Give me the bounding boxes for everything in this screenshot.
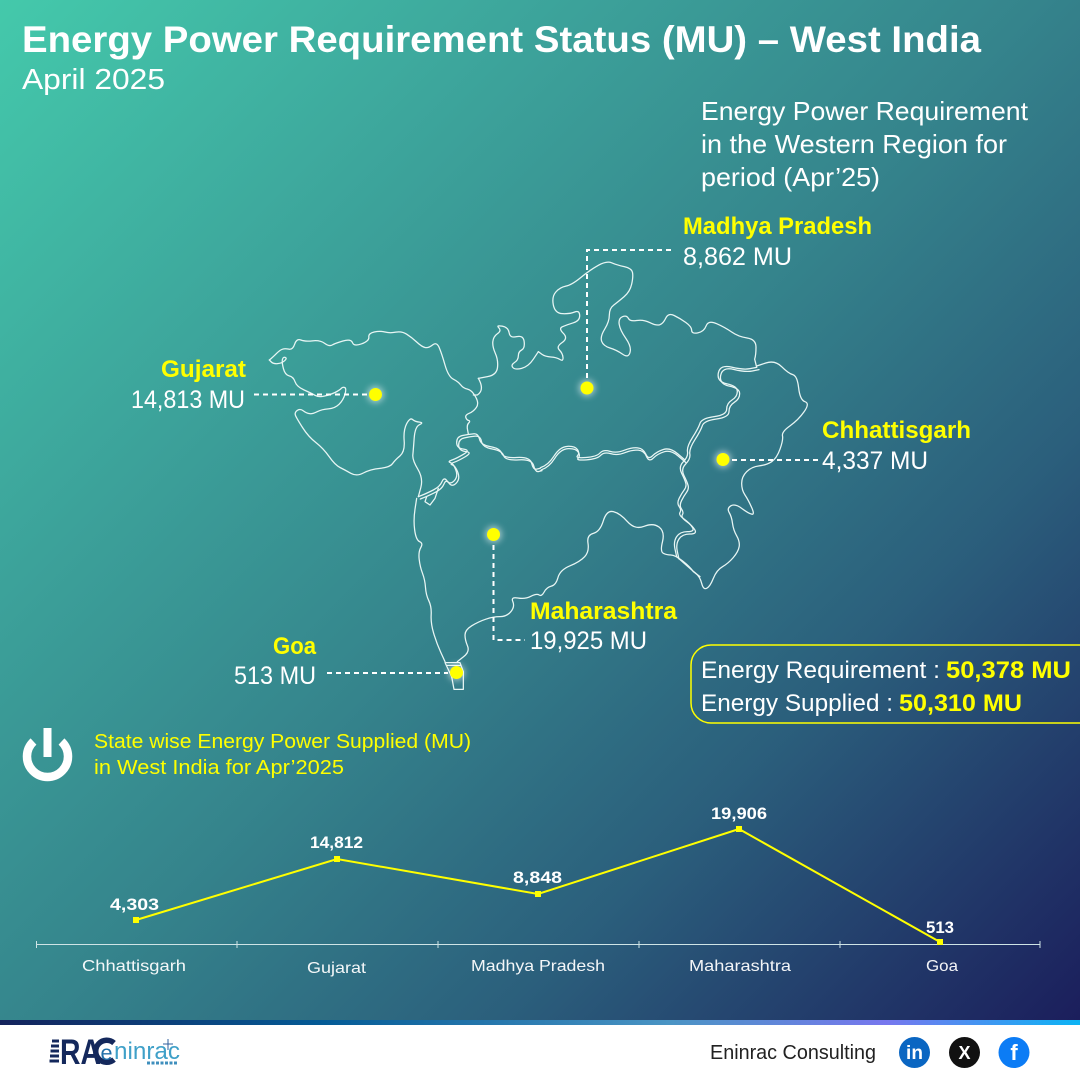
- connector: Gujarat: [254, 394, 368, 396]
- logo: Eninrac: ninrac: [114, 1038, 180, 1065]
- marker: Gujarat: [368, 386, 384, 402]
- footer background: [0, 1025, 1080, 1080]
- line chart: state wise energy supplied: [36, 804, 1040, 977]
- callout: energy totals: Energy Requirement :: [701, 657, 940, 684]
- footer text: Eninrac Consulting: [710, 1042, 876, 1064]
- label: Madhya Pradesh: [683, 213, 872, 271]
- line chart: state wise energy supplied: Maharashtra: [689, 958, 791, 975]
- label: Madhya Pradesh: 8,862 MU: [683, 243, 792, 271]
- label: Maharashtra: [530, 598, 678, 655]
- marker: Maharashtra: [486, 526, 502, 542]
- logo: Eninrac: [50, 1033, 180, 1072]
- label: Chhattisgarh: 4,337 MU: [822, 447, 928, 475]
- marker: Chhattisgarh: [715, 452, 731, 468]
- text block: map description: [701, 96, 1029, 192]
- line chart: state wise energy supplied: Goa: [926, 958, 958, 975]
- label: Goa: Goa: [273, 633, 317, 660]
- callout: energy totals: Energy Supplied :: [701, 690, 893, 717]
- marker: Madhya Pradesh: [579, 380, 595, 396]
- logo: Eninrac: RA: [60, 1033, 101, 1072]
- icon: X: X: [958, 1043, 971, 1063]
- line chart: state wise energy supplied: Madhya Pradesh: [471, 958, 605, 975]
- line chart: state wise energy supplied: 4,303: [110, 895, 159, 914]
- label: Chhattisgarh: [822, 417, 971, 475]
- label: Gujarat: 14,813 MU: [131, 386, 245, 414]
- line chart: state wise energy supplied: 8,848: [513, 868, 562, 887]
- icon: Facebook: [998, 1037, 1030, 1068]
- connector: Maharashtra: [494, 545, 525, 640]
- label: Maharashtra: 19,925 MU: [530, 627, 647, 655]
- line chart: state wise energy supplied: Chhattisgarh: [82, 958, 186, 975]
- icon: LinkedIn: [899, 1037, 930, 1068]
- callout: energy totals: 50,378 MU: [946, 657, 1071, 684]
- line chart: state wise energy supplied: Gujarat: [307, 960, 367, 977]
- marker: Goa: [448, 664, 464, 680]
- text block: map description: period (Apr’25): [701, 162, 880, 192]
- chart heading: State wise Energy Power Supplied (MU): [94, 731, 471, 753]
- label: Goa: 513 MU: [234, 662, 316, 690]
- label: Goa: [234, 633, 317, 690]
- callout: energy totals: 50,310 MU: [899, 690, 1022, 717]
- label: Maharashtra: Maharashtra: [530, 598, 678, 625]
- logo: Eninrac: e: [100, 1042, 112, 1065]
- icon: power symbol: [27, 728, 68, 777]
- connector: Goa: [327, 672, 448, 674]
- line chart: state wise energy supplied: 513: [926, 918, 954, 937]
- label: Chhattisgarh: Chhattisgarh: [822, 417, 971, 444]
- line chart: state wise energy supplied: 19,906: [711, 804, 767, 823]
- line chart: state wise energy supplied: 14,812: [310, 833, 363, 852]
- icon: Facebook: f: [1010, 1040, 1018, 1065]
- label: Gujarat: [131, 356, 246, 414]
- title: Energy Power Requirement Status (MU) – West India: [22, 19, 981, 60]
- footer colour bar: [0, 1020, 1080, 1025]
- map: West India state outlines: [269, 262, 807, 689]
- connector: Madhya Pradesh: [587, 250, 671, 380]
- subtitle: April 2025: [22, 64, 165, 96]
- label: Madhya Pradesh: Madhya Pradesh: [683, 213, 872, 240]
- label: Gujarat: Gujarat: [161, 356, 246, 383]
- connector: Chhattisgarh: [732, 459, 820, 461]
- icon: LinkedIn: in: [906, 1043, 923, 1064]
- text block: map description: Energy Power Requirement: [701, 96, 1029, 126]
- chart heading: in West India for Apr’2025: [94, 757, 344, 779]
- chart heading: [94, 731, 471, 779]
- callout: energy totals: [691, 645, 1080, 723]
- text block: map description: in the Western Region for: [701, 129, 1007, 159]
- icon: X: [949, 1037, 980, 1068]
